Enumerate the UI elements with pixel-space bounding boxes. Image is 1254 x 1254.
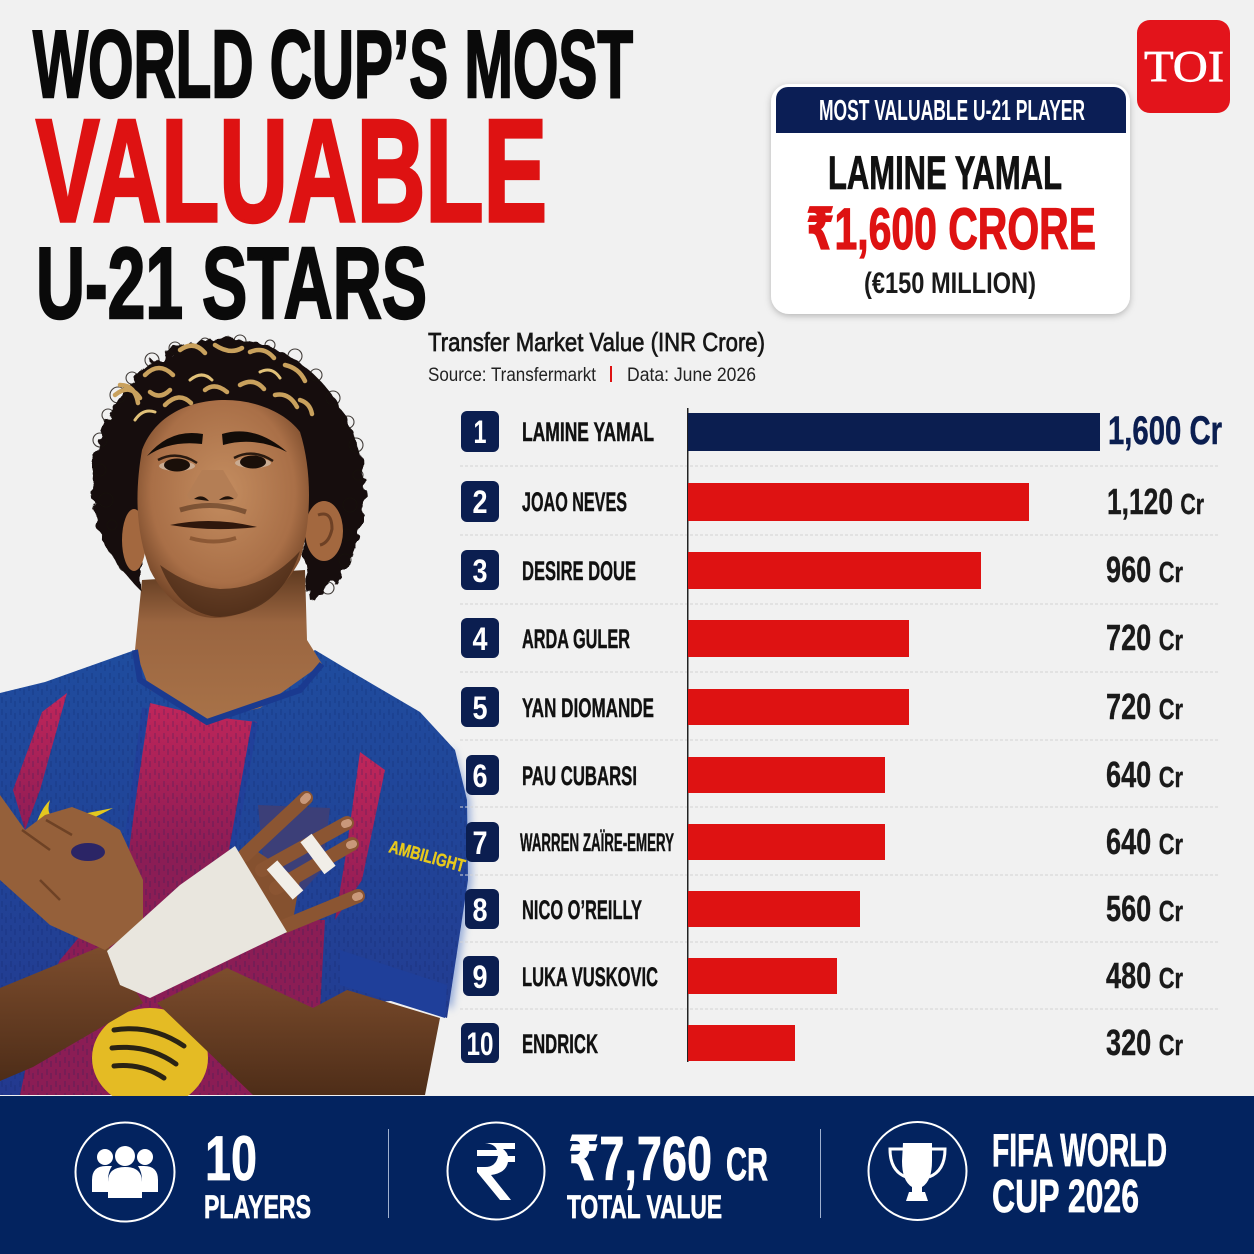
callout value: ₹1,600 CRORE (806, 197, 1096, 262)
stat: total value: CR (726, 1138, 768, 1190)
stat: players: PLAYERS (204, 1189, 311, 1225)
jersey (0, 650, 472, 1095)
stat: players (76, 1122, 311, 1225)
row 1 (461, 409, 1222, 453)
club crest (258, 805, 330, 905)
bar chart (460, 408, 1222, 1063)
icon: trophy (868, 1122, 966, 1220)
row 4: ARDA GULER (522, 624, 630, 654)
row 10: 10 (466, 1026, 494, 1062)
row 2: 1,120 Cr (1107, 481, 1204, 522)
row 10: 320 Cr (1106, 1022, 1183, 1063)
left hand (0, 795, 143, 950)
row 7: 7 (472, 825, 488, 861)
forearms (0, 944, 440, 1095)
title line 3: U-21 STARS (36, 228, 427, 340)
row 9 (463, 955, 1183, 996)
face (137, 400, 309, 618)
row 10: ENDRICK (522, 1029, 598, 1059)
collar (135, 650, 322, 722)
callout header (776, 87, 1126, 133)
row 1: LAMINE YAMAL (522, 417, 654, 447)
finger tape (272, 838, 330, 895)
chart heading: Data: June 2026 (627, 365, 756, 386)
stat: total value (448, 1122, 768, 1225)
icon: people (76, 1122, 174, 1222)
row 6: PAU CUBARSI (522, 761, 637, 791)
icon: TOI logo (1137, 20, 1230, 113)
callout: most valuable U-21 player: MOST VALUABLE U-21 PLAYER (819, 95, 1085, 127)
row 5: 720 Cr (1106, 686, 1183, 727)
row 8: 8 (472, 892, 488, 928)
callout: most valuable U-21 player (771, 84, 1130, 314)
stat: total value: TOTAL VALUE (567, 1189, 722, 1225)
row 5 (461, 686, 1183, 727)
source line: Source: Transfermarkt (428, 365, 597, 386)
hair (92, 335, 365, 600)
row 2 (461, 481, 1204, 522)
icon: rupee (448, 1122, 544, 1220)
chart heading (428, 327, 765, 386)
footer band (0, 1096, 1254, 1254)
row 8: NICO O’REILLY (522, 895, 642, 925)
row 8 (465, 888, 1183, 929)
row 4: 4 (472, 621, 488, 657)
player portrait (0, 335, 472, 1108)
title (33, 11, 633, 340)
row 2: 2 (472, 484, 488, 520)
jersey logo text: AMBILIGHT (387, 837, 467, 876)
stat: players: 10 (205, 1124, 257, 1194)
sponsor logo (92, 1008, 208, 1108)
right hand (236, 797, 359, 932)
row 1: 1 (474, 414, 486, 450)
row 6: 640 Cr (1106, 754, 1183, 795)
row 5: 5 (472, 690, 488, 726)
title line 2: VALUABLE (36, 89, 547, 252)
row 10 (461, 1022, 1183, 1063)
row 7: 640 Cr (1106, 821, 1183, 862)
callout name: LAMINE YAMAL (828, 146, 1062, 199)
icon: TOI logo: TOI (1144, 42, 1224, 91)
row 8: 560 Cr (1106, 888, 1183, 929)
row 9: 480 Cr (1106, 955, 1183, 996)
fingertip nails (304, 797, 359, 897)
row 6 (466, 754, 1183, 795)
row 7: WARREN ZAÏRE-EMERY (520, 829, 674, 857)
row 9: 9 (472, 959, 488, 995)
row 6: 6 (472, 758, 488, 794)
row 5: YAN DIOMANDE (522, 693, 654, 723)
row 7 (466, 821, 1183, 862)
swoosh (33, 800, 113, 836)
row 2: JOAO NEVES (522, 487, 627, 517)
row 3 (461, 549, 1183, 590)
stat: tournament (868, 1122, 1167, 1222)
ears (122, 501, 343, 571)
row 9: LUKA VUSKOVIC (522, 962, 658, 992)
row 3: 960 Cr (1106, 549, 1183, 590)
callout euro value: (€150 MILLION) (864, 267, 1036, 300)
row 3: 3 (472, 553, 488, 589)
stat: tournament: CUP 2026 (992, 1170, 1139, 1222)
wrist bandage (107, 846, 287, 998)
row 4 (461, 617, 1183, 658)
chart heading: Transfer Market Value (INR Crore) (428, 327, 765, 357)
stat: total value: ₹7,760 (568, 1125, 712, 1194)
neck (135, 570, 322, 720)
row 3: DESIRE DOUE (522, 556, 636, 586)
row 4: 720 Cr (1106, 617, 1183, 658)
title line 1: WORLD CUP’S MOST (33, 11, 633, 118)
